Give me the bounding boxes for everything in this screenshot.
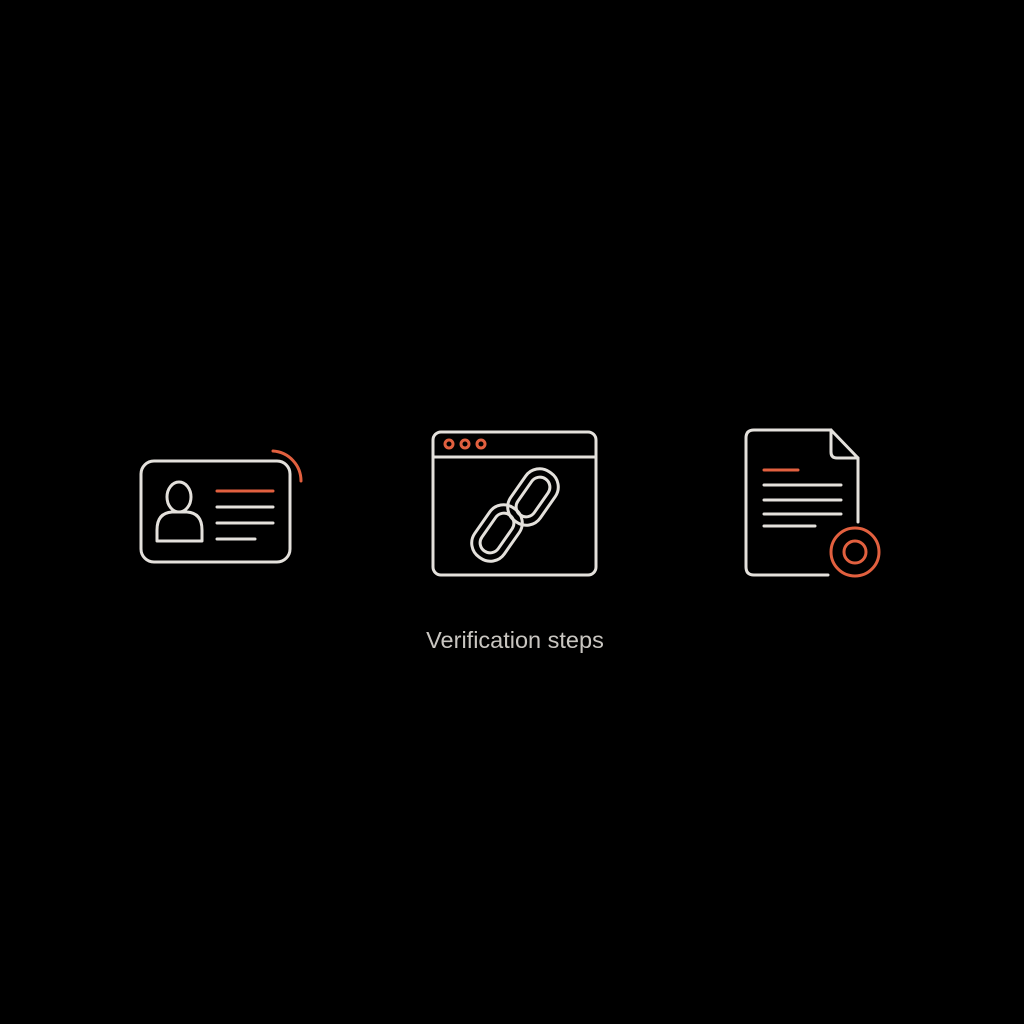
caption: Verification steps (426, 627, 604, 653)
icon: document with seal (746, 430, 879, 576)
icon: browser with link (433, 432, 596, 575)
icon: ID card (141, 451, 301, 562)
